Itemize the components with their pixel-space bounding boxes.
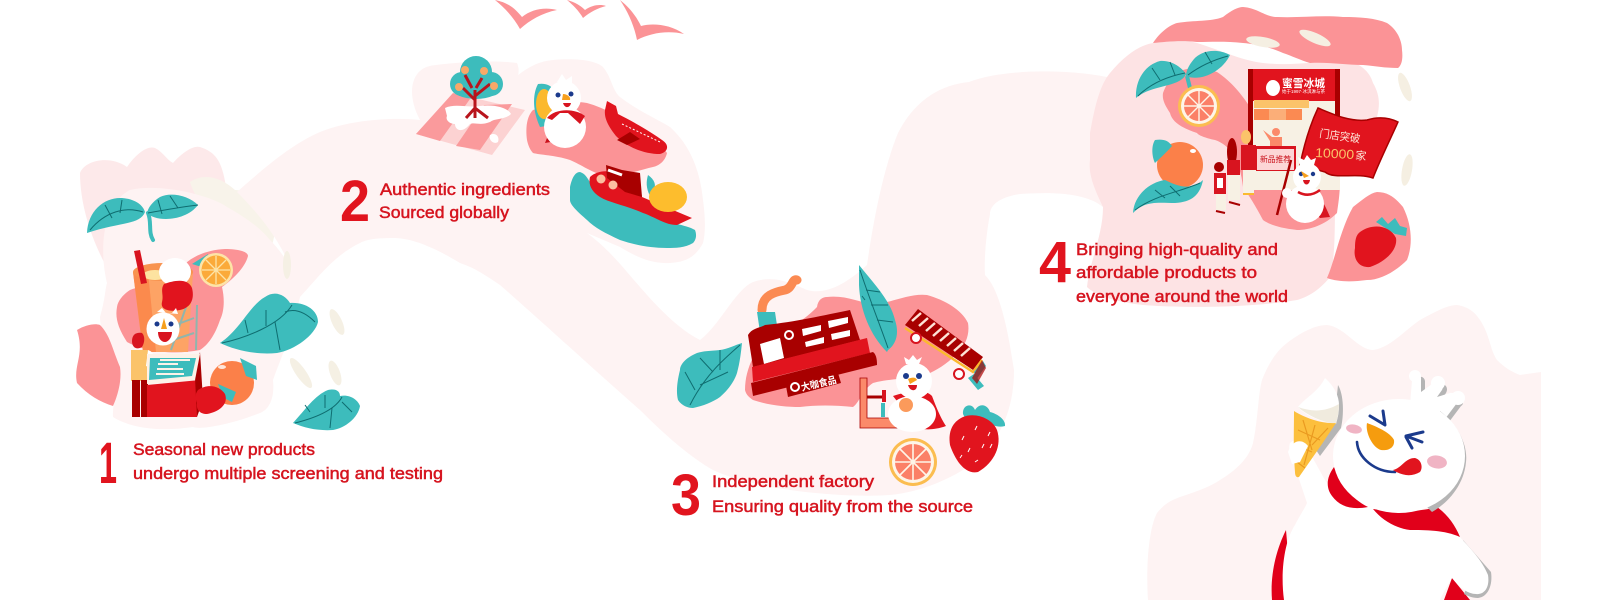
panel: step 1 illustration (76, 195, 360, 430)
panel: step 3 illustration (677, 265, 1005, 486)
step 3 text: Independent factory (712, 472, 875, 491)
storefront: 始于1997·冰淇淋与茶 (1282, 88, 1326, 95)
factory (748, 280, 877, 397)
mascot with backpack (534, 74, 586, 148)
head (1333, 399, 1465, 513)
scarf (1328, 467, 1460, 537)
step 2 text: Sourced globally (379, 203, 510, 222)
strawberry blob (1327, 192, 1411, 281)
strawberry (1355, 217, 1407, 267)
ship (589, 165, 692, 225)
grapefruit (889, 438, 937, 486)
strawberry (196, 384, 236, 414)
tall leaf (859, 265, 897, 352)
top leaves (1136, 51, 1230, 98)
cream ovals (283, 251, 347, 391)
storefront: 蜜雪冰城 (1282, 76, 1325, 90)
birds (495, 0, 684, 40)
salmon blob left (76, 324, 121, 406)
top salmon blob (1153, 7, 1402, 68)
step 1 text: Seasonal new products (133, 440, 315, 459)
step 1 number: 1 (99, 431, 117, 496)
head shadow (1420, 411, 1466, 512)
background blob behind step 1 (80, 147, 229, 290)
cream ovals (1245, 27, 1415, 187)
panel: step 4 illustration (1133, 7, 1415, 281)
mascot with flag (1277, 155, 1330, 223)
factory label: 大咖食品 (800, 373, 838, 394)
salmon blob central (116, 249, 248, 352)
panel: step 2 illustration (416, 56, 696, 248)
step 4 text: everyone around the world (1076, 287, 1288, 306)
leaf pair (87, 195, 198, 240)
background blob behind step 4 (1087, 40, 1379, 307)
step 3 text (712, 472, 973, 516)
machine (860, 378, 897, 428)
strawberry (950, 405, 1005, 472)
right arm shadow (1463, 540, 1491, 598)
step 2 text (379, 180, 550, 222)
crown shadow (1414, 377, 1463, 426)
lemon (647, 175, 687, 212)
ladder (171, 305, 197, 350)
citrus slice (192, 253, 233, 287)
step 3 text: Ensuring quality from the source (712, 497, 973, 516)
climbing mascot (159, 258, 193, 311)
salmon blob (745, 295, 968, 407)
step 2 text: Authentic ingredients (380, 180, 550, 199)
flag: 10000 (1315, 145, 1355, 162)
world map (416, 93, 525, 155)
flag: 家 (1355, 148, 1367, 163)
storefront (1248, 69, 1340, 190)
crown (1409, 370, 1465, 423)
airplane (605, 101, 667, 154)
mascot with orange (888, 355, 946, 432)
step 4 text (1076, 240, 1288, 306)
step 4 number: 4 (1039, 230, 1071, 295)
drink cup (133, 250, 193, 352)
flag: 门店突破 (1319, 126, 1361, 146)
orange and leaves (1133, 140, 1203, 213)
cream smear (190, 177, 290, 245)
mascot face (146, 308, 180, 346)
large mascot with ice cream (1272, 370, 1491, 600)
customers (1214, 130, 1256, 213)
storefront: 新品推荐 (1260, 154, 1291, 164)
salmon blob (526, 102, 667, 178)
person (131, 333, 155, 417)
step 1 text (133, 440, 443, 483)
ice cream cone (1288, 378, 1343, 477)
background blob behind mascot (1147, 305, 1541, 600)
display box (147, 352, 203, 417)
small leaf (293, 389, 360, 430)
background ribbon path (100, 59, 1107, 496)
step 1 text: undergo multiple screening and testing (133, 464, 443, 483)
big leaf (220, 294, 318, 353)
orange (210, 358, 257, 405)
step 4 text: affordable products to (1076, 263, 1257, 282)
conveyor (905, 309, 986, 390)
flag (1300, 108, 1398, 178)
body (1283, 440, 1488, 600)
grapefruit (1178, 85, 1220, 127)
cape (1272, 530, 1470, 600)
central salmon blob (1163, 68, 1340, 230)
step 2 number: 2 (340, 169, 370, 234)
wave (570, 172, 696, 248)
face (1345, 411, 1448, 475)
step 3 number: 3 (671, 463, 701, 528)
step 4 text: Bringing high-quality and (1076, 240, 1278, 259)
tree (450, 56, 503, 118)
left leaf (677, 343, 742, 408)
